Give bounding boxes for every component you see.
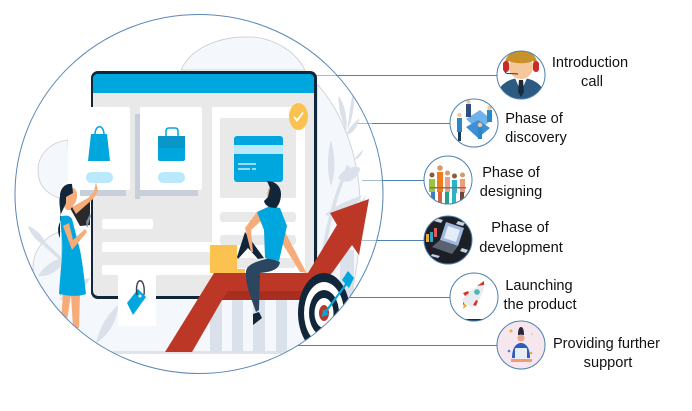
icon: laptop on dark background	[424, 216, 472, 264]
background shapes	[28, 37, 380, 354]
label	[505, 111, 568, 146]
label	[553, 336, 660, 371]
main illustration circle	[15, 14, 383, 374]
label: support	[584, 355, 632, 371]
man sitting	[210, 181, 308, 325]
connector lines	[298, 76, 497, 346]
pointing arm	[72, 182, 98, 214]
chart bars	[210, 250, 354, 352]
product card: handbag	[140, 107, 202, 196]
label	[552, 55, 628, 90]
label	[479, 220, 563, 256]
app window	[68, 71, 317, 299]
icon: woman with laptop	[497, 321, 545, 369]
price tag card	[118, 270, 156, 326]
icon: rocket	[462, 281, 484, 320]
label: Phase of	[505, 111, 564, 127]
woman with phone	[58, 182, 98, 328]
check badge	[289, 103, 308, 130]
label: Phase of	[491, 220, 550, 236]
step 3: phase of designing	[424, 156, 542, 204]
label: Introduction	[552, 55, 628, 71]
leaf decoration: left	[28, 226, 118, 343]
step 6: providing further support	[497, 321, 660, 371]
head	[267, 187, 280, 208]
icon: team around blocks	[457, 100, 492, 141]
main circle outline	[15, 14, 383, 374]
shirt	[257, 206, 287, 261]
step 1: introduction call	[496, 51, 628, 100]
head and hair	[63, 188, 77, 210]
growth arrow	[165, 199, 369, 352]
legs	[246, 258, 280, 312]
label	[503, 278, 577, 313]
arm	[245, 212, 262, 252]
label: designing	[480, 184, 542, 200]
icon: group of people	[429, 165, 466, 204]
dark shape behind	[70, 202, 90, 226]
yellow box	[210, 245, 245, 273]
step 2: phase of discovery	[450, 99, 568, 147]
product card: shopping bag	[68, 107, 140, 199]
label: development	[479, 240, 563, 256]
payment card panel	[212, 107, 305, 290]
step 5: launching the product	[450, 273, 577, 322]
label: Providing further	[553, 336, 660, 352]
label: discovery	[505, 130, 568, 146]
icon: support agent	[500, 52, 542, 98]
label: Launching	[505, 278, 573, 294]
label	[480, 165, 542, 200]
legs	[62, 294, 71, 319]
label: call	[581, 74, 603, 90]
dress	[59, 216, 86, 296]
target with arrow	[298, 271, 354, 340]
label: Phase of	[482, 165, 541, 181]
white row items	[102, 219, 214, 275]
step 4: phase of development	[424, 216, 563, 264]
phone arm	[63, 223, 87, 250]
label: the product	[503, 297, 577, 313]
leaf decoration: right	[322, 96, 366, 250]
